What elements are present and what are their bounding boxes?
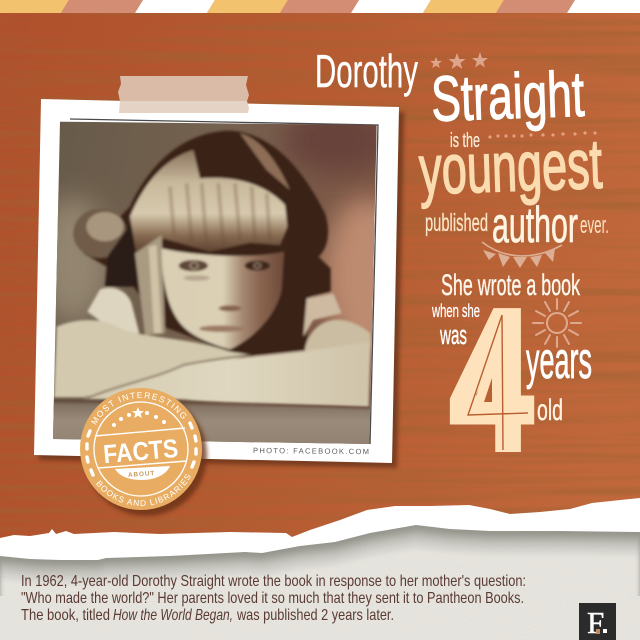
line: was: was <box>439 320 467 350</box>
headline: Dorothy Straight is the youngest published author ever <box>315 45 609 253</box>
logo <box>579 603 616 640</box>
footer paragraph: was published 2 years later. <box>236 607 394 624</box>
band lines <box>95 428 187 468</box>
icon: sun <box>533 299 581 347</box>
dotted divider <box>488 131 597 139</box>
badge: facts about books and libraries: ABOUT <box>128 470 155 479</box>
footer paragraph: In 1962, 4-year-old Dorothy Straight wrote the book in response to her mother's question: <box>21 573 526 590</box>
washi tape <box>118 76 249 113</box>
word: Dorothy: Dorothy <box>315 45 418 97</box>
about ribbon <box>115 466 170 480</box>
footer paragraph: The book, titled <box>21 607 110 624</box>
striped top border <box>0 0 640 13</box>
photo credit: PHOTO: FACEBOOK.COM <box>253 446 369 456</box>
photo: sepia portrait of a girl <box>53 122 377 444</box>
numeral 4: 4 <box>451 270 532 490</box>
stars <box>430 52 488 69</box>
FACTS word: FACTS <box>102 433 179 469</box>
table top <box>53 398 370 444</box>
hair mass <box>83 131 331 357</box>
text: she wrote a book when she was 4 years old <box>431 269 592 490</box>
bunting <box>482 242 562 268</box>
word: published: published <box>425 209 488 237</box>
white torn edge <box>0 498 640 640</box>
word: old: old <box>537 394 563 427</box>
words: is the: is the <box>450 130 480 152</box>
footer paragraph <box>21 573 526 624</box>
shirt <box>87 288 139 333</box>
star row <box>112 407 166 427</box>
badge: facts about books and libraries <box>80 388 210 518</box>
footer paragraph: How the World Began, <box>113 607 233 624</box>
girl <box>54 131 371 407</box>
line: when she: when she <box>431 301 480 321</box>
word: ever: ever. <box>580 212 609 239</box>
torn paper footer <box>0 498 640 640</box>
arms <box>54 320 252 397</box>
logo: F <box>587 605 604 640</box>
fringe streaks <box>168 182 272 236</box>
curved bottom text: BOOKS AND LIBRARIES <box>96 474 190 506</box>
face <box>162 248 284 349</box>
curved top text: MOST INTERESTING <box>91 392 186 425</box>
word: author: author <box>492 197 578 253</box>
paper sheet with tear shadow <box>0 520 640 640</box>
photo backdrop <box>53 122 377 444</box>
rim dashes <box>87 423 196 475</box>
footer paragraph: "Who made the world?" Her parents loved it so much that they sent it to Pantheon Books. <box>21 590 524 607</box>
photo frame <box>34 99 404 468</box>
